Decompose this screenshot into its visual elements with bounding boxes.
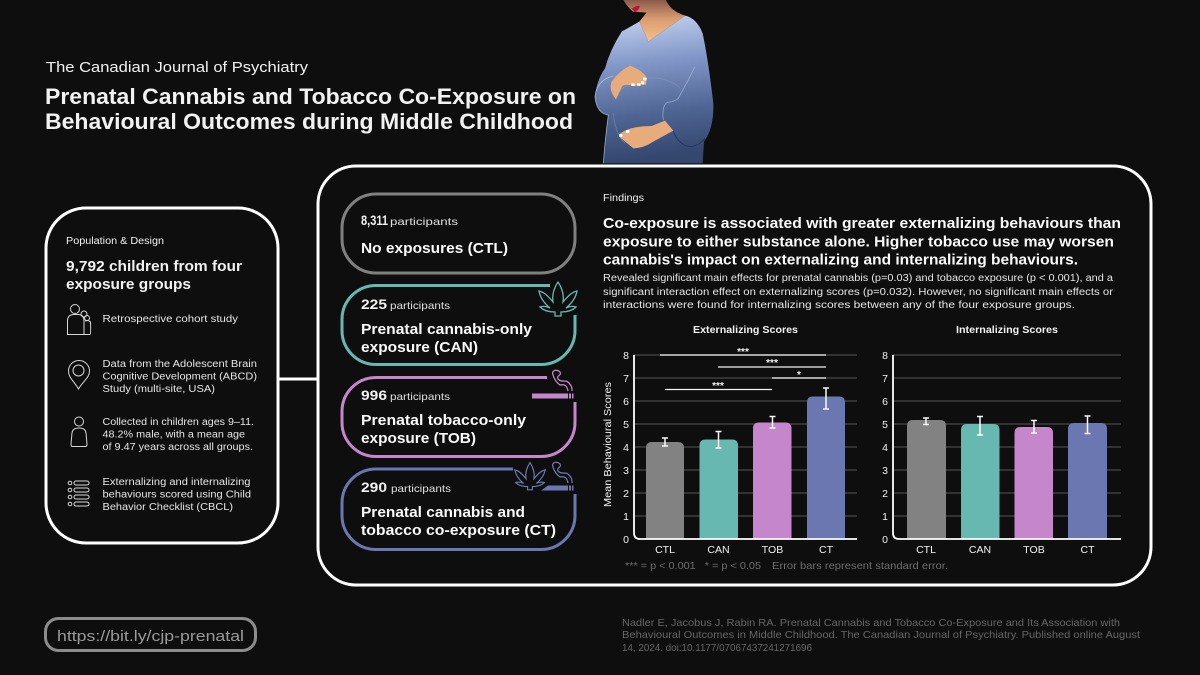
title: Prenatal Cannabis and Tobacco Co-Exposure on bbox=[45, 84, 576, 109]
bars bbox=[907, 420, 1107, 539]
x axis labels: CT bbox=[1080, 544, 1095, 556]
icon: cigarette bbox=[532, 370, 574, 398]
icon: checklist bbox=[68, 481, 89, 506]
text: data source bbox=[102, 359, 257, 395]
text: measure: Externalizing and internalizing bbox=[102, 477, 250, 488]
significance brackets: * bbox=[797, 370, 801, 381]
text: data source: Study (multi-site, USA) bbox=[102, 384, 215, 395]
group: no exposures: participants bbox=[390, 216, 458, 228]
group: co-exposure: participants bbox=[391, 483, 451, 495]
icon: people bbox=[68, 304, 91, 334]
y axis labels: 1 bbox=[623, 511, 629, 523]
icon: cannabis leaf and cigarette bbox=[515, 462, 574, 490]
panel heading: exposure groups bbox=[66, 276, 191, 293]
findings headline: Co-exposure is associated with greater externalizing behaviours than bbox=[603, 215, 1121, 232]
panel: population and design bbox=[46, 208, 278, 543]
panel label: Population & Design bbox=[66, 236, 164, 247]
group: tobacco only bbox=[342, 370, 575, 456]
x axis labels: CT bbox=[819, 544, 834, 556]
group: tobacco only: Prenatal tobacco-only bbox=[361, 412, 527, 429]
group: no exposures: No exposures (CTL) bbox=[361, 240, 508, 257]
y axis labels: 6 bbox=[623, 396, 629, 408]
citation: Behavioural Outcomes in Middle Childhood. The Canadian Journal of Psychiatry. Published online August bbox=[622, 629, 1140, 641]
y axis labels bbox=[623, 350, 629, 546]
x axis labels bbox=[655, 544, 834, 556]
panel: main study content bbox=[318, 166, 1151, 585]
group: co-exposure bbox=[342, 462, 575, 550]
text: measure: behaviours scored using Child bbox=[102, 490, 251, 500]
findings label: Findings bbox=[603, 193, 644, 204]
icon: cannabis leaf bbox=[539, 282, 577, 316]
text: sample: 48.2% male, with a mean age bbox=[102, 430, 246, 440]
x axis labels: CTL bbox=[916, 544, 936, 556]
chart: internalizing scores bbox=[882, 324, 1121, 556]
chart footnote: Error bars represent standard error. bbox=[772, 560, 948, 572]
group: cannabis only bbox=[342, 282, 577, 364]
connector between panels bbox=[278, 378, 319, 380]
axes bbox=[634, 355, 857, 539]
findings headline: cannabis's impact on externalizing and internalizing behaviours. bbox=[603, 252, 1078, 268]
panel heading: 9,792 children from four bbox=[66, 258, 242, 275]
text: measure bbox=[102, 477, 251, 513]
icon: child bbox=[71, 417, 87, 446]
title bbox=[45, 84, 576, 134]
text: sample: Collected in children ages 9–11. bbox=[102, 417, 254, 428]
illustration: pregnant woman bbox=[595, 0, 713, 163]
y axis labels: 1 bbox=[882, 511, 888, 523]
y axis labels: 8 bbox=[882, 350, 888, 362]
y axis labels: 0 bbox=[623, 534, 629, 546]
y axis labels: 2 bbox=[882, 488, 888, 500]
chart: externalizing scores bbox=[602, 324, 857, 556]
findings headline: exposure to either substance alone. Higher tobacco use may worsen bbox=[603, 234, 1114, 250]
citation: Nadler E, Jacobus J, Rabin RA. Prenatal Cannabis and Tobacco Co-Exposure and Its Association with bbox=[622, 617, 1120, 629]
significance brackets bbox=[660, 347, 826, 392]
group: tobacco only: 996 bbox=[361, 387, 387, 403]
title: Behavioural Outcomes during Middle Childhood bbox=[45, 109, 573, 134]
y axis labels: 7 bbox=[623, 373, 629, 385]
y axis labels: 5 bbox=[623, 419, 629, 431]
chart title: Internalizing Scores bbox=[956, 324, 1058, 336]
y axis labels: 4 bbox=[623, 442, 629, 454]
x axis labels: CAN bbox=[707, 544, 730, 556]
x axis labels: TOB bbox=[762, 544, 783, 556]
group: cannabis only: participants bbox=[390, 300, 450, 312]
y axis labels: 7 bbox=[882, 373, 888, 385]
bars bbox=[646, 396, 845, 539]
text: data source: Data from the Adolescent Brain bbox=[102, 359, 257, 370]
findings body text: significant interaction effect on externalizing scores (p=0.032). However, no significant main effects or bbox=[603, 287, 1114, 298]
y axis labels: 3 bbox=[882, 465, 888, 477]
group: tobacco only: participants bbox=[390, 391, 450, 403]
significance brackets: *** bbox=[737, 347, 749, 358]
y axis labels: 0 bbox=[882, 534, 888, 546]
findings headline bbox=[603, 215, 1121, 268]
group: cannabis only: Prenatal cannabis-only bbox=[361, 321, 533, 338]
y axis labels: 5 bbox=[882, 419, 888, 431]
x axis labels: CTL bbox=[655, 544, 675, 556]
chart title: Externalizing Scores bbox=[693, 324, 798, 336]
y axis title: Mean Behavioural Scores bbox=[602, 382, 614, 507]
group: co-exposure: Prenatal cannabis and bbox=[361, 504, 525, 521]
text: sample: of 9.47 years across all groups. bbox=[102, 442, 253, 453]
y axis labels: 2 bbox=[623, 488, 629, 500]
chart footnote: *** = p < 0.001 * = p < 0.05 bbox=[625, 560, 761, 572]
y axis labels: 4 bbox=[882, 442, 888, 454]
x axis labels: CAN bbox=[969, 544, 991, 556]
x axis labels: TOB bbox=[1023, 544, 1045, 556]
group: no exposures bbox=[342, 194, 575, 273]
journal name: The Canadian Journal of Psychiatry bbox=[46, 59, 309, 76]
group: co-exposure: tobacco co-exposure (CT) bbox=[361, 522, 556, 539]
significance brackets: *** bbox=[712, 381, 724, 392]
findings body text: interactions were found for internalizing scores between any of the four exposure groups. bbox=[603, 300, 1075, 311]
findings body text: Revealed significant main effects for prenatal cannabis (p=0.03) and tobacco exposure (p < 0.001), and a bbox=[603, 273, 1114, 284]
link pill bbox=[46, 618, 256, 650]
text: sample bbox=[102, 417, 254, 453]
error bars bbox=[662, 388, 829, 448]
text: study type: Retrospective cohort study bbox=[102, 314, 238, 325]
y axis labels: 6 bbox=[882, 396, 888, 408]
chart footnote bbox=[625, 560, 948, 572]
citation bbox=[622, 617, 1140, 654]
findings body text bbox=[603, 273, 1114, 311]
group: cannabis only: exposure (CAN) bbox=[361, 339, 478, 356]
text: measure: Behavior Checklist (CBCL) bbox=[102, 502, 233, 513]
y axis labels: 8 bbox=[623, 350, 629, 362]
error bars bbox=[923, 416, 1090, 435]
y axis labels: 3 bbox=[623, 465, 629, 477]
citation: 14, 2024. doi:10.1177/07067437241271696 bbox=[622, 642, 812, 654]
group: tobacco only: exposure (TOB) bbox=[361, 430, 476, 447]
y axis labels bbox=[882, 350, 888, 546]
link pill: https://bit.ly/cjp-prenatal bbox=[57, 628, 244, 645]
panel heading bbox=[66, 258, 242, 293]
axes bbox=[893, 355, 1121, 539]
group: cannabis only: 225 bbox=[361, 296, 387, 312]
group: no exposures: 8,311 bbox=[361, 212, 388, 228]
icon: location pin bbox=[68, 361, 90, 389]
text: data source: Cognitive Development (ABCD) bbox=[102, 372, 257, 382]
group: co-exposure: 290 bbox=[361, 479, 387, 495]
x axis labels bbox=[916, 544, 1095, 556]
significance brackets: *** bbox=[766, 358, 778, 369]
